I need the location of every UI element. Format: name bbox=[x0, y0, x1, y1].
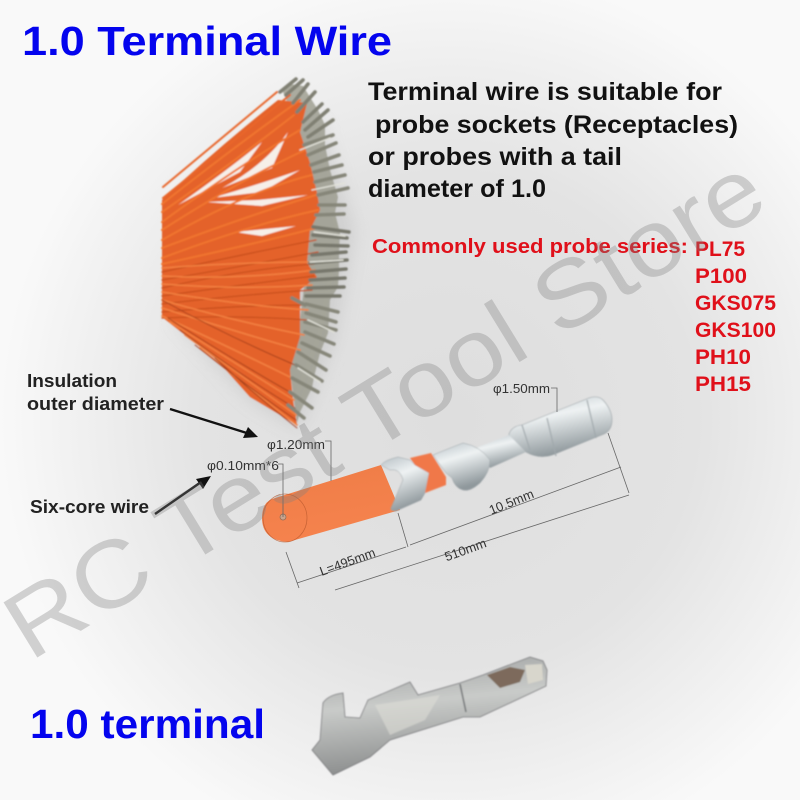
probe series list: PH10 bbox=[695, 346, 751, 369]
probe series list: PH15 bbox=[695, 373, 751, 396]
title: 1.0 Terminal Wire bbox=[22, 18, 392, 64]
watermark: RC Test Tool Store bbox=[0, 135, 782, 679]
bottom label: 1.0 terminal: 1.0 terminal bbox=[30, 701, 265, 747]
description text block: diameter of 1.0 bbox=[368, 175, 546, 203]
orange insulated wire cylinder bbox=[262, 465, 400, 542]
label: 0.10mm by 6 with leader: φ0.10mm*6 bbox=[207, 458, 279, 473]
probe series list bbox=[695, 238, 776, 396]
metal terminal body bbox=[381, 397, 612, 511]
diagram: terminal cross-section with dimensions bbox=[207, 381, 629, 590]
probe series list: GKS075 bbox=[695, 292, 776, 315]
label: L=495mm: L=495mm bbox=[318, 545, 377, 579]
callout: six-core wire bbox=[30, 476, 211, 517]
probe series list: GKS100 bbox=[695, 319, 776, 342]
callout: insulation outer diameter: Insulation bbox=[27, 371, 117, 391]
metal tip clump bbox=[283, 84, 340, 423]
label: 0.10mm by 6 with leader bbox=[207, 458, 283, 517]
probe series list: PL75 bbox=[695, 238, 745, 261]
label: 1.20mm diameter with leader bbox=[267, 437, 331, 481]
photo: bare 1.0 terminal bbox=[312, 657, 547, 775]
description text block bbox=[368, 78, 738, 203]
label: 1.50mm diameter with leader bbox=[493, 381, 557, 412]
photo: orange terminal wire bundle bbox=[162, 79, 355, 430]
callout: insulation outer diameter bbox=[27, 371, 258, 438]
callout: insulation outer diameter: outer diameter bbox=[27, 394, 164, 414]
description text block: or probes with a tail bbox=[368, 143, 622, 171]
probe series list: P100 bbox=[695, 265, 747, 288]
label: 1.50mm diameter with leader: φ1.50mm bbox=[493, 381, 550, 396]
probe series heading: Commonly used probe series: bbox=[372, 236, 688, 258]
callout: six-core wire: Six-core wire bbox=[30, 497, 149, 517]
dimension lines bbox=[286, 433, 629, 590]
description text block: Terminal wire is suitable for bbox=[368, 78, 722, 106]
label: 10.5mm: 10.5mm bbox=[487, 486, 536, 518]
description text block: probe sockets (Receptacles) bbox=[375, 111, 738, 139]
label: 510mm: 510mm bbox=[443, 535, 488, 564]
label: 1.20mm diameter with leader: φ1.20mm bbox=[267, 437, 325, 452]
